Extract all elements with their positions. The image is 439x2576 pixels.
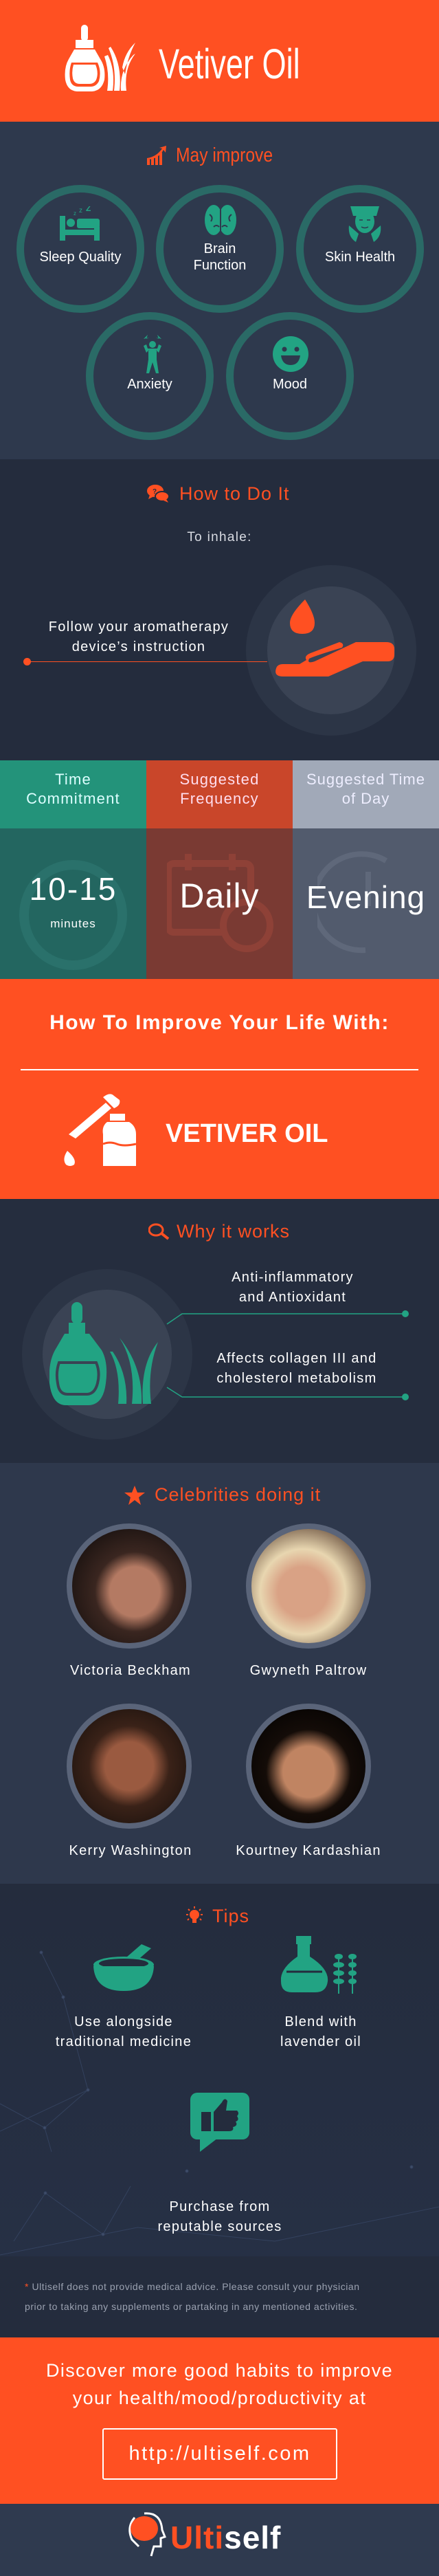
text: follow instruction: device’s instruction [72,639,205,654]
icon: brain head [128,2512,166,2556]
panel: how to improve banner [0,979,439,1199]
icon: green bottle in circle [22,1269,192,1440]
heading: tips: Tips [212,1906,249,1926]
cell: suggested frequency [146,760,293,979]
circle: brain function [156,185,284,313]
text: follow instruction [49,619,229,654]
icon: chat bubbles [147,485,168,503]
icon: bed: z [74,210,76,217]
cell: time commitment [0,760,146,979]
text: anti-inflammatory: and Antioxidant [239,1290,346,1305]
icon: light bulb [186,1906,203,1923]
cell: time of day: of Day [342,790,390,807]
text: follow instruction: Follow your aromatherapy [49,619,229,635]
text: vetiver oil: VETIVER OIL [166,1119,328,1148]
disclaimer: * Ultiself does not provide medical advice. Please consult your physician [25,2281,360,2292]
icon: hand with drop [246,565,416,736]
icon: oil bottle and grass [65,25,135,91]
text: collagen: cholesterol metabolism [216,1371,377,1386]
icon: magnifier [148,1224,169,1240]
panel: why it works [0,1199,439,1463]
cell: time of day: Evening [306,879,425,915]
circle: brain function: Function [194,258,246,273]
icon: faded calendar [167,854,273,952]
heading: celebrities: Celebrities doing it [155,1484,321,1505]
icon: stressed figure [144,335,161,373]
text: collagen: Affects collagen III and [216,1351,377,1366]
logo [128,2512,281,2556]
tip: reputable sources: reputable sources [157,2219,282,2234]
button: url: http://ultiself.com [128,2443,311,2465]
cell: suggested frequency: Frequency [180,790,259,807]
cell: time of day: Suggested Time [306,771,425,788]
circle: skin health [296,185,424,313]
tip: lavender oil: lavender oil [280,2034,361,2049]
cell: time commitment: Time [55,771,91,788]
circle: mood [226,312,354,440]
icon: bed [60,206,100,241]
icon: growth chart [147,146,166,165]
panel: may improve [0,122,439,459]
tip: reputable sources: Purchase from [170,2199,270,2214]
tip: traditional medicine: Use alongside [74,2014,173,2029]
tip: lavender oil: Blend with [284,2014,357,2029]
button: url [102,2428,337,2480]
heading: how to improve: How To Improve Your Life With: [49,1011,390,1034]
icon: bed: z [79,207,82,214]
text: ultiself: Ultiself [170,2520,281,2555]
tip: reputable sources [157,2093,282,2234]
icon: brain [205,205,236,235]
celebrity: kourtney kardashian [236,1704,381,1858]
celebrity: kerry washington [67,1704,192,1858]
connector lines [166,1310,409,1400]
decorative network [0,1951,439,2255]
disclaimer [25,2281,360,2312]
celebrity: gwyneth paltrow: Gwyneth Paltrow [250,1663,367,1678]
circle: anxiety [86,312,214,440]
celebrity: kourtney kardashian: Kourtney Kardashian [236,1843,381,1858]
panel: how to do it [0,459,439,760]
icon: dropper and bottle [64,1094,136,1166]
cell: time of day [293,760,439,979]
icon: star [124,1486,145,1505]
icon: chat bubbles: ? [153,488,157,496]
circle: sleep quality [16,185,144,313]
panel: celebrities [0,1463,439,1884]
heading: may improve: May improve [176,144,273,166]
heading: how to do it: How to Do It [179,483,290,504]
circle: brain function: Brain [204,241,236,256]
cell: time commitment: Commitment [26,790,120,807]
tip: lavender oil [280,1936,361,2049]
title: Vetiver Oil [159,41,300,87]
heading: tips [186,1906,249,1926]
celebrity: kerry washington: Kerry Washington [69,1843,192,1858]
circle: skin health: Skin Health [325,250,395,265]
text: discover more: your health/mood/productivity at [73,2388,366,2408]
panel: stats [0,760,439,979]
celebrity: gwyneth paltrow [246,1523,371,1678]
text: anti-inflammatory [232,1270,354,1305]
text: discover more [46,2360,393,2408]
circle: sleep quality: Sleep Quality [40,250,121,265]
panel: tips [0,1884,439,2256]
footer [0,2504,439,2576]
heading: why it works: Why it works [177,1221,290,1242]
icon: thumbs up bubble [190,2093,249,2152]
tip: traditional medicine: traditional medicine [56,2034,192,2049]
icon: smiley [273,336,308,372]
circle: anxiety: Anxiety [127,377,172,392]
celebrity: victoria beckham [67,1523,192,1678]
icon: face [349,206,381,242]
cell: suggested frequency: Daily [179,877,260,915]
tip: traditional medicine [56,1944,192,2049]
header [0,0,439,122]
connector line [27,661,267,662]
text: collagen [216,1351,377,1386]
celebrity: victoria beckham: Victoria Beckham [70,1663,191,1678]
text: discover more: Discover more good habits to improve [46,2360,393,2381]
text: to inhale: To inhale: [187,530,252,544]
circle: mood: Mood [273,377,307,392]
cell: time commitment: minutes [50,917,96,930]
icon: mortar and pestle [93,1944,154,1991]
icon: faded clock [317,851,387,953]
cell: suggested frequency: Suggested [180,771,260,788]
text: anti-inflammatory: Anti-inflammatory [232,1270,354,1285]
cell: time commitment: 10-15 [30,871,117,907]
icon: flask and lavender [281,1936,357,1994]
panel: call to action [0,2337,439,2504]
disclaimer: prior to taking any supplements or partaking in any mentioned activities. [25,2301,357,2312]
